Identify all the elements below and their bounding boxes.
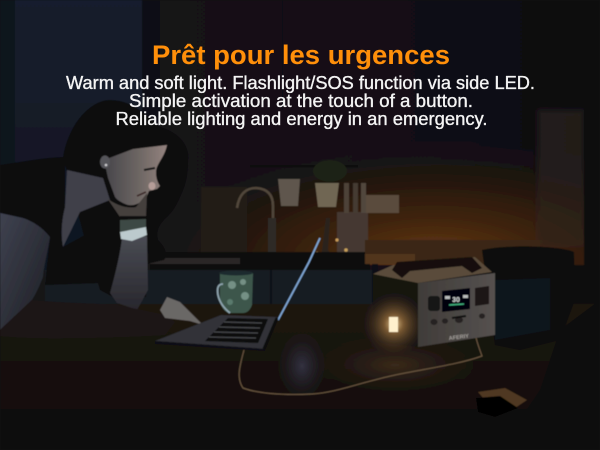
description text: Reliable lighting and energy in an emergency. bbox=[116, 109, 488, 129]
face bbox=[104, 145, 167, 205]
description text: Simple activation at the touch of a button. bbox=[129, 91, 473, 111]
jar silhouette bbox=[320, 218, 338, 266]
dark objects at right bbox=[476, 246, 600, 450]
lamp glow bbox=[362, 292, 426, 356]
table bbox=[0, 304, 600, 450]
knife block bbox=[337, 183, 368, 268]
brand: AFERIY bbox=[449, 334, 470, 342]
wall socket bbox=[366, 195, 399, 213]
shirt bbox=[0, 157, 100, 285]
description text bbox=[66, 73, 535, 129]
forearm bbox=[110, 236, 148, 310]
body front bbox=[418, 273, 495, 347]
description text: Warm and soft light. Flashlight/SOS function via side LED. bbox=[66, 73, 535, 93]
icon: hanging pot bbox=[278, 179, 300, 206]
cable bbox=[239, 320, 482, 394]
hand at chin bbox=[107, 193, 147, 217]
left socket bbox=[428, 296, 440, 311]
buttons bbox=[430, 313, 485, 325]
display: 30 bbox=[452, 297, 460, 304]
warm table patch bbox=[478, 388, 527, 408]
power station bbox=[362, 257, 495, 356]
screen edge bbox=[278, 238, 320, 320]
kitchen background objects bbox=[201, 160, 399, 268]
bracelets bbox=[120, 216, 147, 241]
eye and mouth bbox=[144, 168, 155, 170]
keyboard bbox=[205, 318, 268, 343]
hand on trackpad bbox=[160, 297, 203, 325]
lower arm on table bbox=[0, 300, 175, 338]
base bbox=[155, 315, 277, 349]
upper arm bbox=[0, 213, 50, 330]
icon: tap bbox=[237, 188, 273, 252]
table light glows bbox=[278, 332, 480, 400]
hair bbox=[63, 100, 188, 297]
right socket bbox=[475, 286, 489, 306]
icon: plant pot bbox=[313, 160, 347, 207]
counter and cabinets bbox=[45, 240, 540, 306]
rail bbox=[250, 165, 358, 168]
title: Prêt pour les urgences bbox=[152, 40, 450, 70]
board bbox=[201, 187, 247, 252]
woman bbox=[0, 100, 203, 338]
body side bbox=[373, 274, 420, 347]
laptop bbox=[155, 238, 320, 351]
mug bbox=[218, 270, 253, 313]
neck and chest bbox=[62, 170, 110, 247]
top and handle bbox=[373, 257, 492, 283]
lamp bbox=[389, 317, 398, 332]
